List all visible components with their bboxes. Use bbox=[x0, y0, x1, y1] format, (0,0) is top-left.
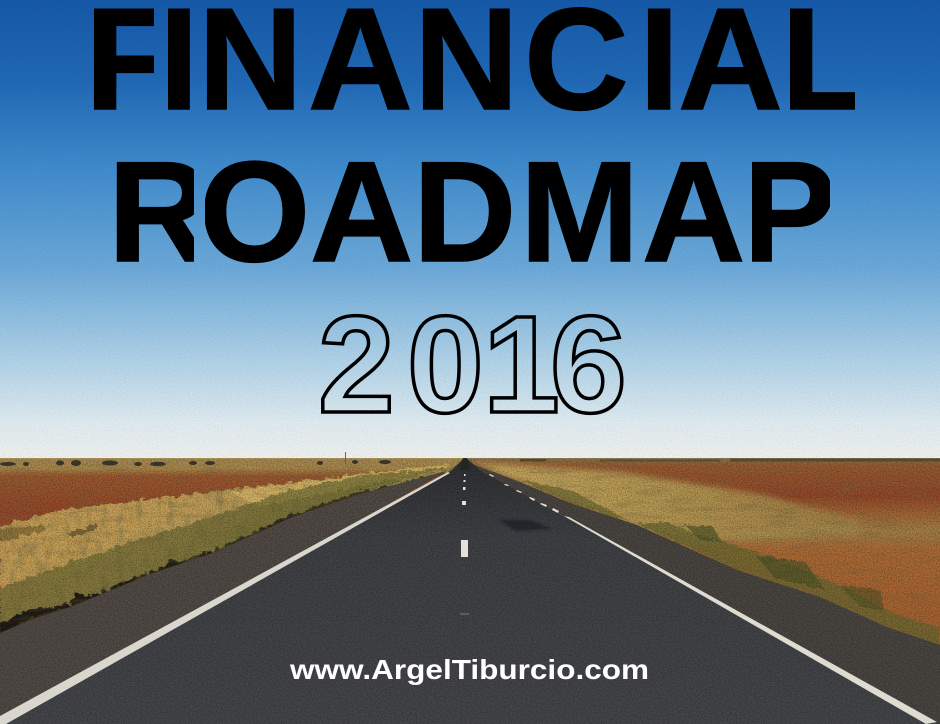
title: ROADMAP: ROADMAP bbox=[108, 133, 836, 292]
landscape: right field bbox=[466, 458, 940, 650]
landscape: left field bbox=[0, 458, 466, 640]
centre dashes bbox=[460, 474, 469, 615]
road dark tip bbox=[459, 458, 470, 470]
left golden highlight bbox=[230, 464, 452, 506]
sky background bbox=[0, 0, 940, 460]
left dry grass bank bbox=[0, 463, 456, 632]
field texture bbox=[0, 464, 940, 644]
road darker patch bbox=[499, 520, 552, 531]
left white edge line bbox=[0, 472, 450, 724]
left grass shadow tufts bbox=[0, 516, 300, 635]
gravel shoulders bbox=[0, 462, 463, 724]
right white edge line bbox=[489, 474, 937, 724]
sky grain bbox=[0, 0, 940, 459]
left olive grass base bbox=[0, 468, 446, 632]
ground grain bbox=[0, 459, 940, 724]
left grass blades texture bbox=[0, 464, 452, 621]
road surface bbox=[0, 458, 940, 724]
year: 2016 outline: 2016 bbox=[318, 288, 627, 442]
right olive roadside shrubs bbox=[520, 480, 940, 645]
right tan grass band bbox=[470, 462, 860, 540]
left bank underlay bbox=[0, 466, 450, 640]
website url: www.ArgelTiburcio.com bbox=[289, 654, 649, 685]
distant trees bbox=[0, 452, 940, 466]
